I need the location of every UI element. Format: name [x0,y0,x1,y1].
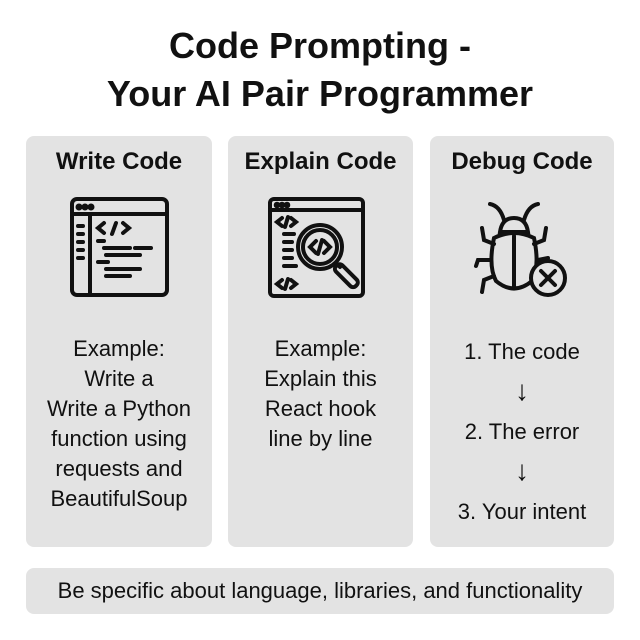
title: Code Prompting - [169,25,471,66]
bottom tip bar [26,568,614,614]
text: write example: Write a [84,366,154,391]
text: debug steps: ↓ [515,375,529,406]
text: debug steps: 1. The code [464,339,580,364]
text: explain example: React hook [265,396,376,421]
text: debug steps: 2. The error [465,419,579,444]
icon: bug with wrench [474,202,567,297]
panel: write code [26,136,212,547]
text: debug steps [458,339,586,524]
text: explain example: Example: [275,336,366,361]
text: explain example [264,336,377,451]
panel: explain code [228,136,413,547]
title: Your AI Pair Programmer [107,73,533,114]
heading: debug code: Debug Code [451,148,593,175]
text: write example: function using [51,426,187,451]
text: write example: Write a Python [47,396,191,421]
icon: magnifier over code [268,197,365,298]
icon: code editor [70,197,169,297]
text: write example: requests and [55,456,183,481]
text: debug steps: 3. Your intent [458,499,586,524]
text: debug steps: ↓ [515,455,529,486]
text: write example [47,336,191,511]
title [107,25,533,114]
text: explain example: Explain this [264,366,377,391]
bottom tip bar: Be specific about language, libraries, and functionality [58,578,582,603]
panel: debug code [430,136,614,547]
text: write example: BeautifulSoup [50,486,188,511]
text: write example: Example: [73,336,165,361]
heading: explain code: Explain Code [244,148,397,175]
text: explain example: line by line [269,426,372,451]
heading: write code: Write Code [56,148,182,175]
